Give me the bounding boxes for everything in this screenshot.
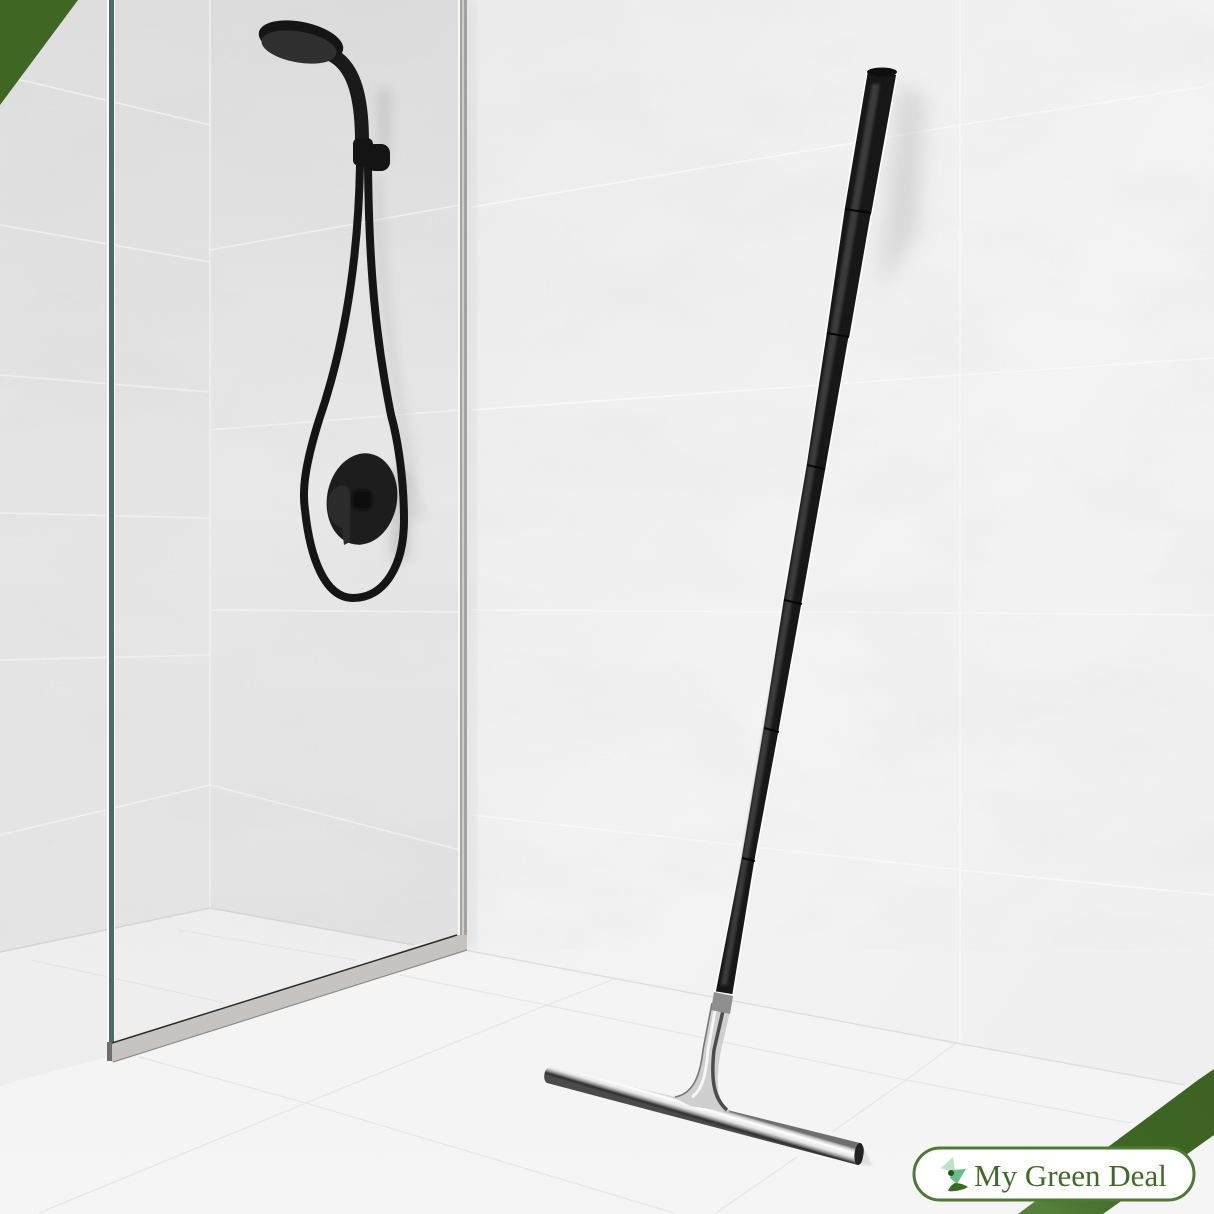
shower: wall bracket xyxy=(353,138,390,171)
squeegee neck xyxy=(673,1000,732,1112)
glass right frame xyxy=(458,0,474,950)
floor line xyxy=(0,908,414,952)
shower: arm xyxy=(330,54,362,142)
glass left edge xyxy=(107,0,115,1045)
corner ribbon: bottom right xyxy=(1018,1069,1214,1214)
right wall tile joints xyxy=(472,0,1214,1043)
logo badge xyxy=(914,1148,1194,1200)
telescopic handle xyxy=(715,68,897,995)
floor seen through the glass xyxy=(0,908,458,1085)
marble veining xyxy=(0,0,1214,950)
floor tile joints xyxy=(0,975,1130,1213)
brand name: My Green Deal xyxy=(974,1158,1167,1193)
handle shadow on wall xyxy=(880,85,925,290)
handle highlight xyxy=(721,84,880,985)
enclosure tile joints xyxy=(0,75,460,850)
shower enclosure wall: back xyxy=(210,0,460,950)
squeegee shadow xyxy=(780,1140,872,1166)
shower enclosure wall: left xyxy=(0,0,210,952)
shower: head xyxy=(255,13,347,69)
squeegee blade xyxy=(544,1066,865,1165)
wall and floor junction xyxy=(465,950,1185,1085)
right wall xyxy=(465,0,1214,1094)
glass bottom rail xyxy=(107,935,467,1062)
enclosure floor joints xyxy=(31,930,356,1003)
metal ferrule xyxy=(711,992,733,1014)
shower: hose xyxy=(304,165,404,598)
corner ribbon: top left xyxy=(0,0,78,105)
badge pill xyxy=(914,1148,1194,1200)
handle body xyxy=(715,72,897,995)
corner line xyxy=(209,0,211,908)
logo icon xyxy=(941,1157,968,1191)
handle segment joints xyxy=(742,209,871,861)
shower: mixer valve xyxy=(320,448,404,550)
shadows of fittings xyxy=(376,90,418,560)
